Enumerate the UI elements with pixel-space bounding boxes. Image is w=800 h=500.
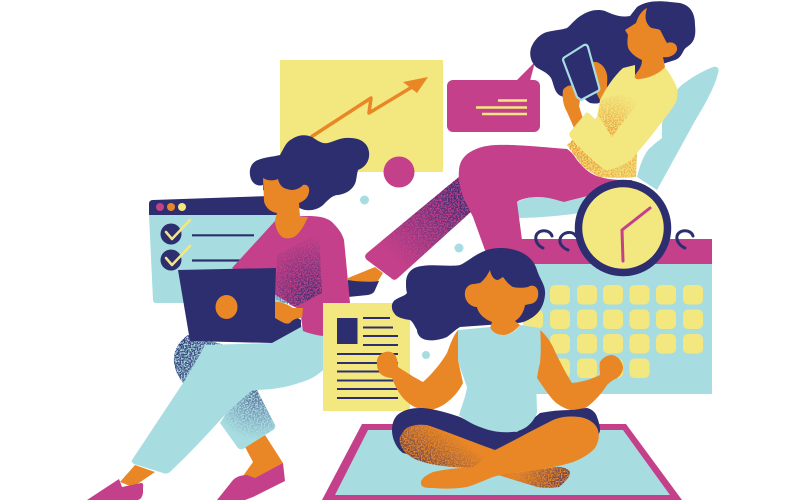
near leg — [459, 145, 632, 264]
face and neck — [263, 178, 309, 238]
long hair — [530, 1, 695, 104]
sweater — [567, 65, 677, 178]
yoga mat — [322, 424, 682, 500]
woman with laptop — [87, 135, 369, 500]
decorative dots — [360, 196, 464, 359]
crossed legs shadow — [392, 408, 600, 465]
right arm — [537, 330, 623, 410]
back leg stipple — [220, 388, 275, 449]
hair — [392, 248, 545, 340]
checklist window — [149, 196, 290, 303]
calendar — [500, 231, 712, 394]
checklist items — [160, 220, 254, 270]
far leg — [365, 176, 473, 280]
woman with phone — [348, 1, 695, 297]
calendar rings — [536, 231, 693, 250]
face and neck — [465, 270, 538, 335]
hand — [275, 302, 303, 324]
chart background — [280, 60, 443, 172]
left thigh shading — [400, 425, 510, 470]
front hand — [563, 85, 584, 128]
bottom foot shading — [495, 467, 570, 488]
document image — [337, 318, 358, 344]
laptop logo — [216, 295, 238, 319]
shoe — [348, 280, 379, 297]
stippled thigh — [174, 335, 225, 386]
back leg — [220, 388, 275, 449]
phone — [563, 45, 599, 100]
document — [323, 303, 410, 411]
foot — [348, 267, 383, 283]
thigh stipple — [174, 335, 225, 386]
chart panel — [280, 60, 443, 172]
calendar date cells — [523, 285, 703, 378]
face and neck — [625, 8, 677, 79]
back hand — [592, 62, 608, 100]
speech bubble — [447, 62, 540, 132]
back shoe and foot — [87, 465, 155, 500]
sweater shading — [598, 84, 652, 137]
far leg shading — [365, 176, 473, 280]
left arm — [377, 330, 463, 410]
window body — [149, 215, 290, 303]
clock hands — [622, 208, 650, 261]
window title bar — [149, 196, 284, 215]
clock — [578, 184, 668, 272]
bottom foot — [495, 467, 570, 488]
calendar header — [500, 239, 712, 264]
window buttons — [156, 203, 186, 211]
calendar body — [525, 264, 712, 394]
sweater hem shading — [567, 138, 637, 178]
laptop — [178, 268, 301, 343]
decorative circle — [384, 156, 414, 188]
meditating woman — [377, 248, 623, 489]
sleeve — [569, 88, 677, 170]
tank top — [458, 325, 541, 432]
front shoe and foot — [217, 435, 285, 500]
sweater — [232, 216, 350, 337]
document text lines — [337, 318, 398, 398]
sweater shading — [276, 233, 322, 307]
trousers — [132, 325, 327, 474]
left thigh — [400, 425, 510, 470]
right leg — [421, 416, 599, 489]
chair — [515, 67, 719, 218]
rising arrow — [311, 77, 428, 137]
hair — [250, 135, 369, 210]
